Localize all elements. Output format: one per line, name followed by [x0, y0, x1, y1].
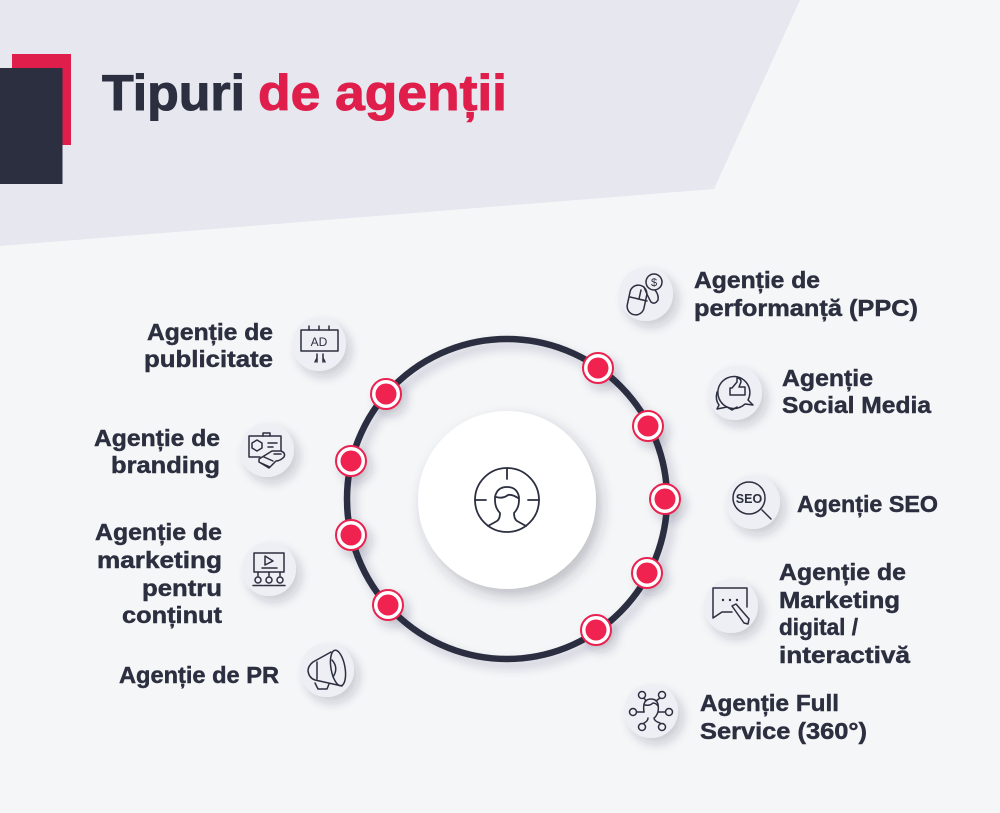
label: marketing pentru continut: pentru: [142, 575, 222, 601]
label: publicitate: [144, 319, 273, 372]
label: social media: [782, 365, 931, 418]
title: Tipuri: [102, 65, 245, 121]
label: full service: Agenție Full: [700, 690, 839, 717]
label: marketing pentru continut: conținut: [122, 602, 222, 629]
label: PR: Agenție de PR: [119, 662, 279, 689]
icon: advertising billboard: [292, 317, 346, 371]
icon: network with person: [624, 684, 678, 738]
label: marketing digital: Marketing: [779, 587, 900, 613]
ring markers: [336, 353, 680, 645]
icon: mouse with dollar: [619, 267, 673, 321]
title accent blocks: [0, 54, 71, 184]
icon: SEO magnifier: [726, 475, 780, 529]
icon: mouse with dollar: $: [651, 277, 657, 289]
label: marketing digital: [779, 559, 910, 668]
label: SEO: Agenție SEO: [797, 491, 938, 518]
label: marketing pentru continut: Agenție de: [95, 519, 222, 546]
label: marketing pentru continut: marketing: [97, 547, 222, 573]
icon: branding card and hand: [240, 423, 294, 477]
label: branding: branding: [111, 452, 220, 478]
label: social media: Social Media: [782, 392, 931, 418]
icon: chat with pen: [704, 579, 758, 633]
icon: SEO magnifier: SEO: [736, 492, 762, 506]
title: de agenții: [258, 65, 507, 121]
icon: content presentation: [242, 542, 296, 596]
title: [102, 65, 507, 121]
label: publicitate: Agenție de: [147, 319, 273, 346]
label: publicitate: publicitate: [144, 346, 273, 372]
label: marketing digital: digital /: [779, 614, 859, 640]
centre circle with person target icon: [418, 411, 596, 589]
central ring: [347, 339, 667, 659]
label: social media: Agenție: [782, 365, 873, 392]
label: performanta: Agenție de: [694, 267, 820, 294]
header background band: [0, 0, 800, 246]
label: marketing pentru continut: [95, 519, 222, 629]
label: full service: Service (360°): [700, 718, 867, 744]
icon: thumbs up chat: [708, 366, 762, 420]
label: performanta: performanță (PPC): [694, 295, 918, 322]
icon: advertising billboard: AD: [311, 335, 328, 349]
label: full service: [700, 690, 867, 744]
label: marketing digital: Agenție de: [779, 559, 906, 586]
label: performanta: [694, 267, 918, 322]
label: branding: [94, 425, 220, 478]
label: branding: Agenție de: [94, 425, 220, 452]
label: marketing digital: interactivă: [779, 642, 910, 668]
icon: megaphone: [300, 643, 354, 697]
icon: person in target: [475, 468, 539, 532]
